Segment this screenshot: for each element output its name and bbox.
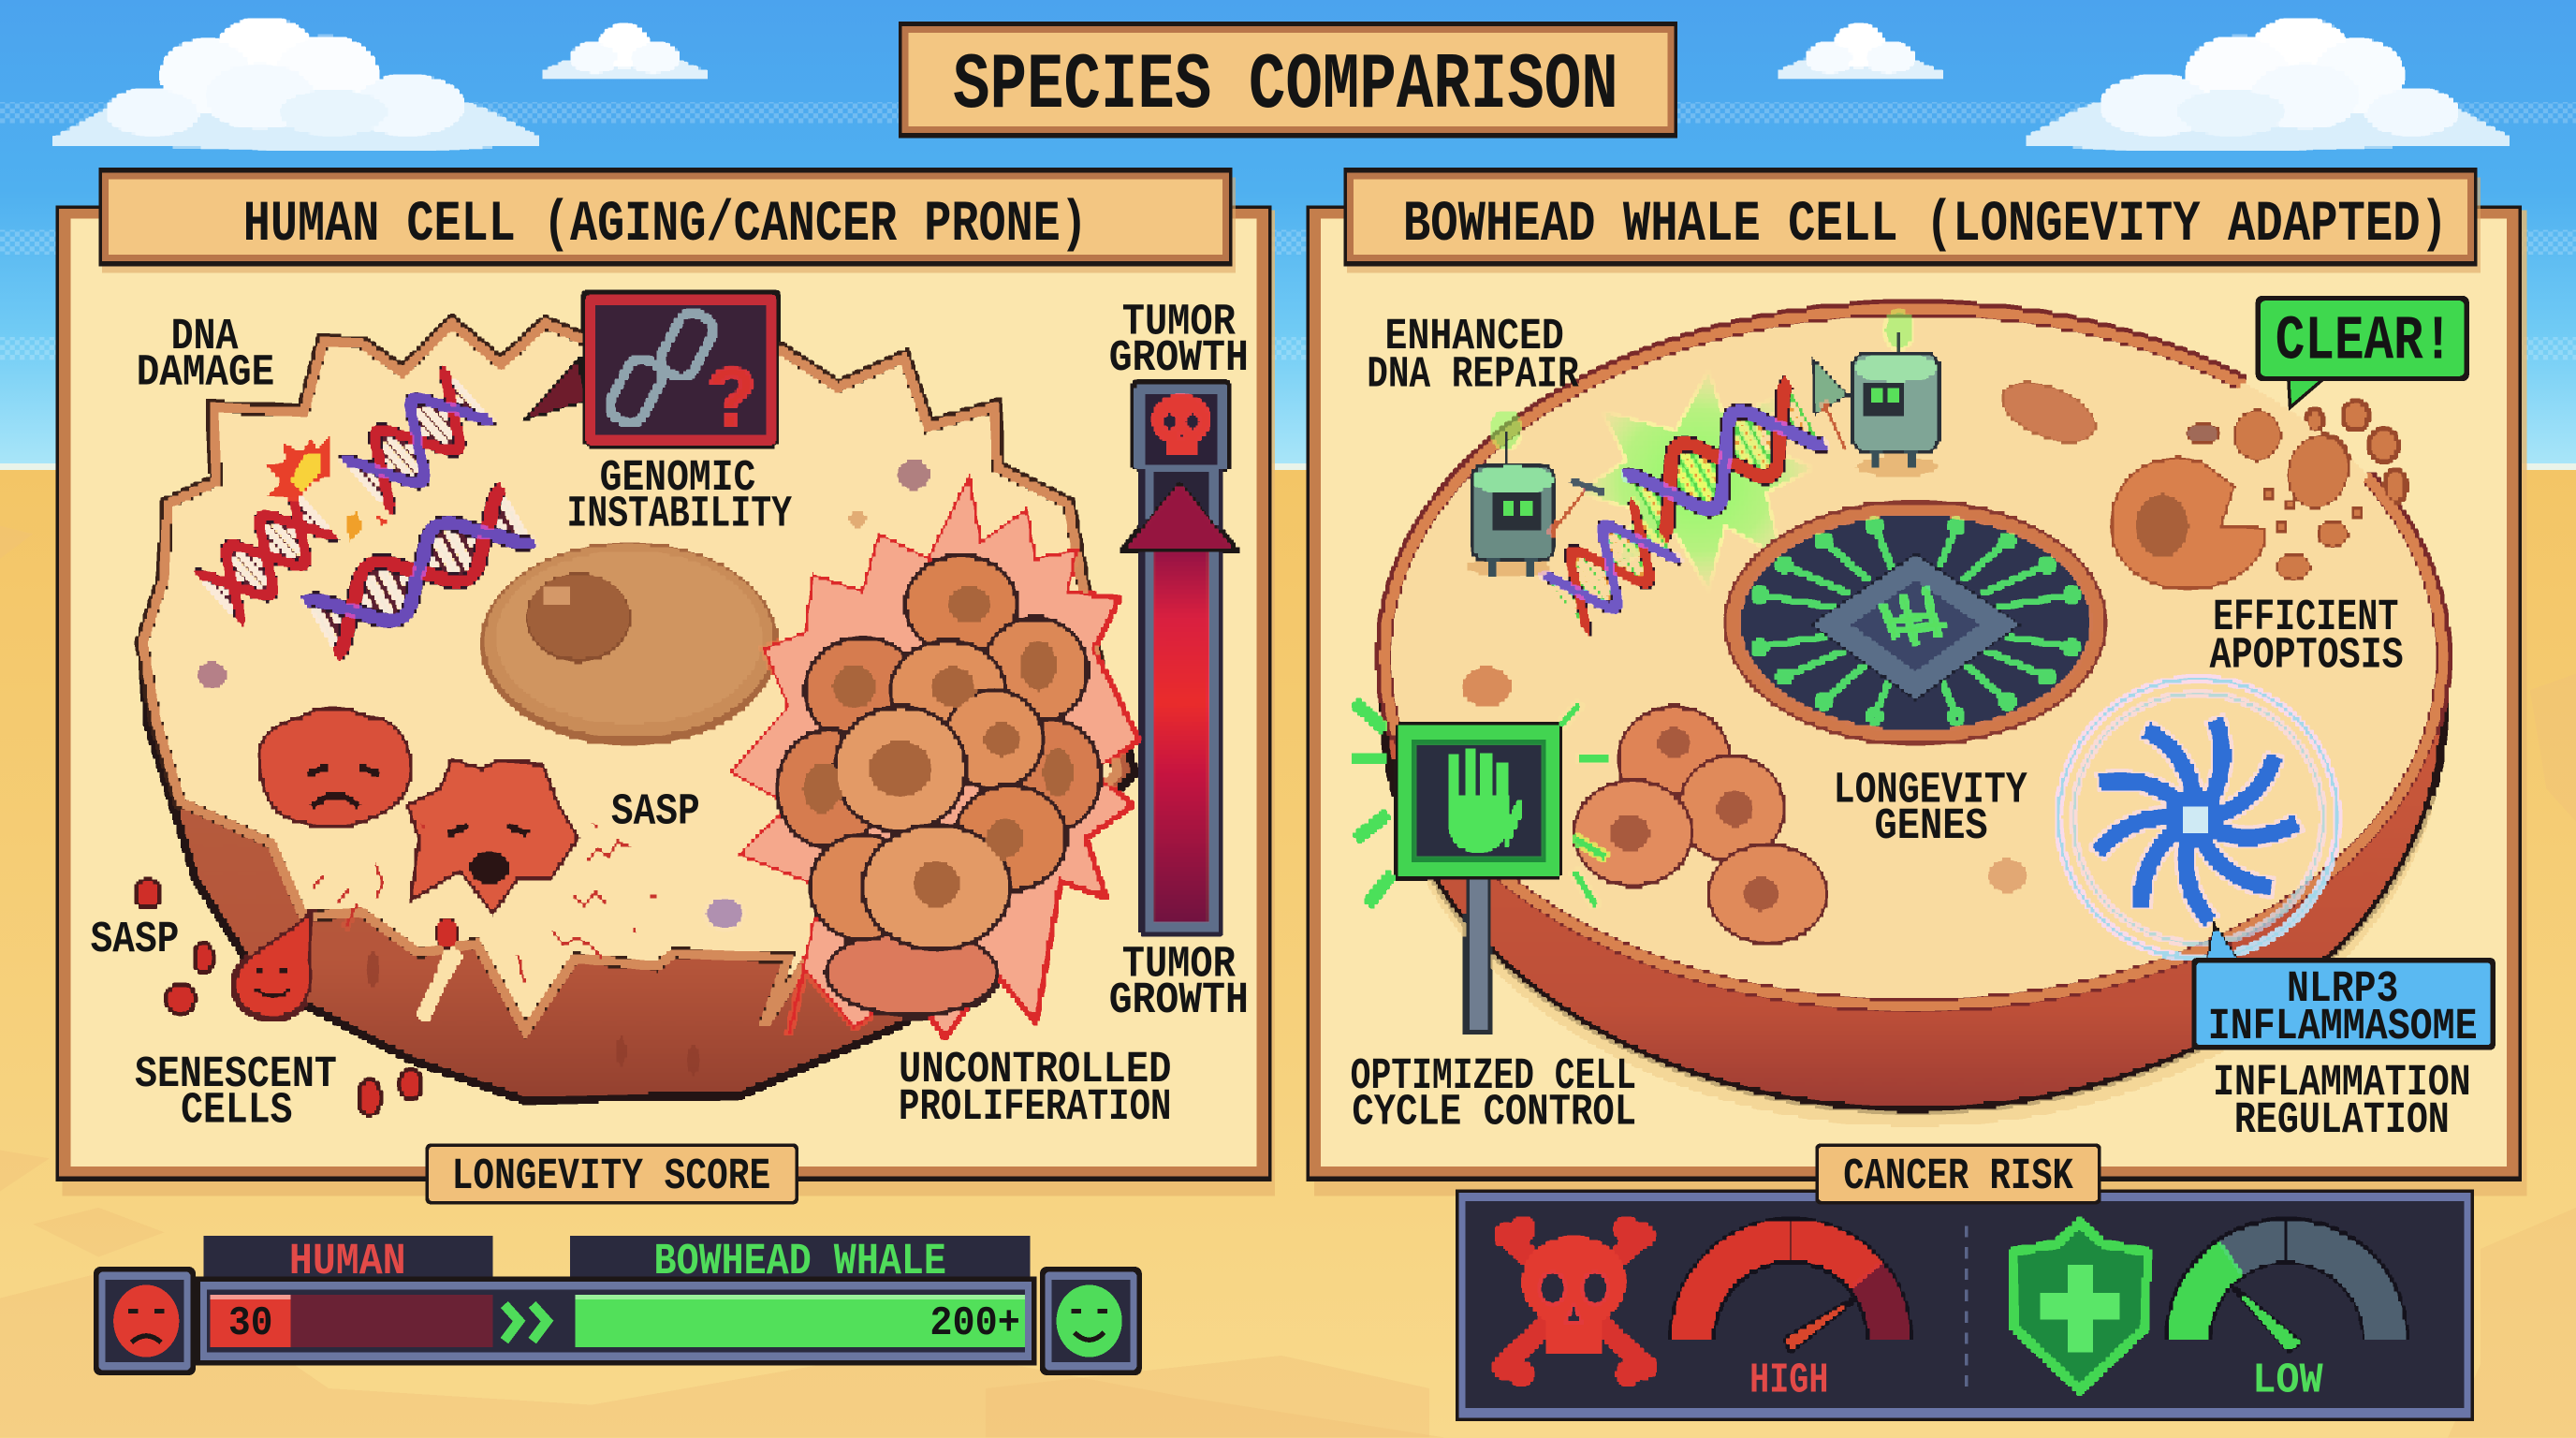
longevity score tag: [426, 1143, 798, 1204]
label: senescent cells: [135, 1050, 337, 1137]
score bar: 30: [228, 1300, 272, 1347]
sign pole: [1467, 879, 1488, 1030]
longevity nucleus: [1721, 498, 2110, 748]
label: efficient apoptosis: APOPTOSIS: [2210, 632, 2404, 682]
sign rays: [1352, 703, 1610, 907]
cloud: large right: [2026, 18, 2510, 151]
label: dna damage: DAMAGE: [137, 349, 274, 399]
cancer risk tag: CANCER RISK: [1843, 1152, 2073, 1202]
sky dither bands: [0, 102, 2576, 360]
label: enhanced dna repair: [1367, 313, 1579, 400]
tumor growth gauge: [1123, 381, 1236, 935]
nlrp3 pointer: [2204, 923, 2244, 969]
label: longevity genes: LONGEVITY: [1834, 766, 2027, 815]
risk icons: [1493, 1217, 2385, 1390]
dna damage: helix 3: [302, 487, 535, 657]
title text: SPECIES COMPARISON: [953, 42, 1618, 131]
heading: whale cell: [1344, 168, 2481, 272]
label: efficient apoptosis: EFFICIENT: [2213, 594, 2398, 643]
label: sasp left: SASP: [91, 916, 179, 965]
crust details: [365, 945, 701, 1077]
label: longevity genes: [1834, 766, 2027, 852]
tab: bowhead whale: BOWHEAD WHALE: [654, 1238, 946, 1287]
label: longevity genes: GENES: [1875, 802, 1988, 852]
label: dna damage: [137, 313, 274, 399]
sasp particles: [313, 822, 657, 983]
inflammasome ring: [2058, 679, 2337, 958]
tumor cluster: [731, 477, 1137, 1035]
icon: damage burst: [263, 431, 391, 546]
organelle left: [1460, 666, 1513, 708]
score bar: 200+: [929, 1300, 1020, 1347]
icon: sad face: [94, 1267, 196, 1375]
label: genomic instability: GENOMIC: [600, 454, 755, 504]
label: inflammation regulation: INFLAMMATION: [2213, 1059, 2471, 1108]
label: genomic instability: [567, 454, 792, 540]
repair glow: [1577, 370, 1815, 592]
nlrp3 callout: NLRP3: [2287, 965, 2398, 1015]
label: high: HIGH: [1749, 1357, 1828, 1405]
label: tumor growth top: TUMOR: [1122, 298, 1236, 347]
heading: human cell: [98, 168, 1236, 272]
inflammasome core: [2185, 808, 2206, 831]
gauge arrow head: [1123, 481, 1236, 550]
label: optimized cell cycle control: [1351, 1052, 1636, 1137]
whale cell body: [1384, 309, 2443, 1125]
senescent cell: sad face 2: [407, 759, 578, 914]
cloud: small left: [542, 24, 707, 77]
heading: human cell: HUMAN CELL (AGING/CANCER PRONE): [243, 193, 1088, 257]
label: uncontrolled proliferation: [899, 1046, 1171, 1133]
dna damage: broken helix 2: [196, 488, 337, 624]
clouds: [54, 18, 2510, 151]
whale score fill: [575, 1295, 1025, 1347]
whale cell illustration: [1352, 309, 2443, 1125]
label: enhanced dna repair: DNA REPAIR: [1367, 350, 1579, 400]
icon: shield: [2012, 1223, 2147, 1390]
label: tumor growth bottom: GROWTH: [1109, 976, 1249, 1026]
gauge fill: [1155, 542, 1208, 923]
label: tumor growth bottom: TUMOR: [1122, 940, 1236, 990]
panel: bowhead whale cell: [1306, 205, 2526, 1196]
inflammasome arms: [2093, 718, 2300, 925]
label: low: LOW: [2252, 1357, 2323, 1405]
label: optimized cell cycle control: OPTIMIZED CELL: [1351, 1052, 1636, 1102]
whale helix lower: [1541, 502, 1679, 632]
label: tumor growth bottom: [1109, 940, 1249, 1026]
label: optimized cell cycle control: CYCLE CONTROL: [1352, 1088, 1636, 1137]
human score fill: [211, 1295, 493, 1347]
tumor nuclei: [802, 585, 1075, 909]
tumor cells: [777, 555, 1101, 1016]
icon: broken chain: [605, 308, 718, 429]
icon: stop hand: [1449, 749, 1521, 851]
longevity score tag: LONGEVITY SCORE: [452, 1152, 770, 1202]
bean organelle: [1994, 371, 2103, 454]
score bar: [196, 1277, 1036, 1365]
human cell illustration: [137, 291, 1236, 1114]
label: dna damage: DNA: [171, 313, 239, 362]
senescent cell: sad face 1: [259, 708, 411, 827]
icon: skull and crossbones: [1493, 1217, 1656, 1385]
tab: human: HUMAN: [289, 1238, 406, 1287]
label: senescent cells: SENESCENT: [135, 1050, 337, 1100]
label: tumor growth top: [1109, 298, 1249, 384]
gauge: high risk: [1692, 1221, 1889, 1351]
icon: gene chip: [1808, 550, 2024, 703]
cloud: large left: [54, 18, 539, 151]
sand ground: [0, 470, 2576, 1438]
organelle lower: [1986, 858, 2029, 894]
label: inflammation regulation: REGULATION: [2234, 1096, 2450, 1146]
apoptotic cell: [2111, 459, 2265, 589]
tab: human: [204, 1236, 493, 1287]
nucleus: [478, 540, 781, 748]
tumor burst: [731, 477, 1137, 1035]
question mark: ?: [707, 352, 756, 444]
robot left: [1466, 411, 1605, 579]
label: genomic instability: INSTABILITY: [567, 491, 792, 540]
label: efficient apoptosis: [2210, 594, 2404, 682]
icon: happy face: [1040, 1267, 1142, 1375]
icon: skull: [1153, 395, 1209, 456]
nlrp3 callout: [2191, 958, 2496, 1052]
cancer risk panel: [1456, 1143, 2474, 1421]
label: tumor growth top: GROWTH: [1109, 334, 1249, 384]
panel: human cell: [56, 205, 1275, 1196]
healthy cell group: [1573, 707, 1827, 943]
label: sasp center: SASP: [611, 787, 700, 837]
sasp droplets: [137, 881, 459, 1114]
clear speech bubble: [2256, 296, 2469, 407]
dna damage: helix 1: [343, 369, 492, 512]
nlrp3 inflammasome: [2058, 679, 2337, 958]
arrows: [505, 1304, 547, 1341]
nlrp3 callout: INFLAMMASOME: [2208, 1003, 2478, 1052]
label: inflammation regulation: [2213, 1059, 2471, 1146]
apoptosis fragments: [2187, 403, 2405, 580]
label: uncontrolled proliferation: PROLIFERATION: [899, 1083, 1171, 1133]
cloud: small right: [1778, 24, 1942, 77]
longevity score panel: [94, 1143, 1142, 1375]
whale helix upper: [1623, 380, 1827, 539]
label: uncontrolled proliferation: UNCONTROLLED: [899, 1046, 1171, 1095]
gauge: low risk: [2188, 1221, 2385, 1351]
senescent cell: teardrop: [235, 909, 313, 1018]
robot right: [1812, 311, 1940, 478]
horizon foam: [0, 463, 2576, 472]
organelles: [196, 459, 931, 930]
cancer risk tag: [1815, 1143, 2101, 1204]
human cell membrane and cytoplasm: [143, 324, 1134, 1099]
genomic instability callout: [522, 291, 781, 448]
label: senescent cells: CELLS: [181, 1087, 292, 1137]
clear speech bubble: CLEAR!: [2276, 307, 2452, 378]
divider: [1966, 1225, 1968, 1390]
sand patches: [0, 526, 2576, 1438]
cell cycle stop sign: [1352, 703, 1610, 1030]
title banner: [899, 22, 1677, 138]
longevity gene traces: [1754, 520, 2077, 722]
sky background: [0, 0, 2576, 477]
label: enhanced dna repair: ENHANCED: [1385, 313, 1564, 362]
